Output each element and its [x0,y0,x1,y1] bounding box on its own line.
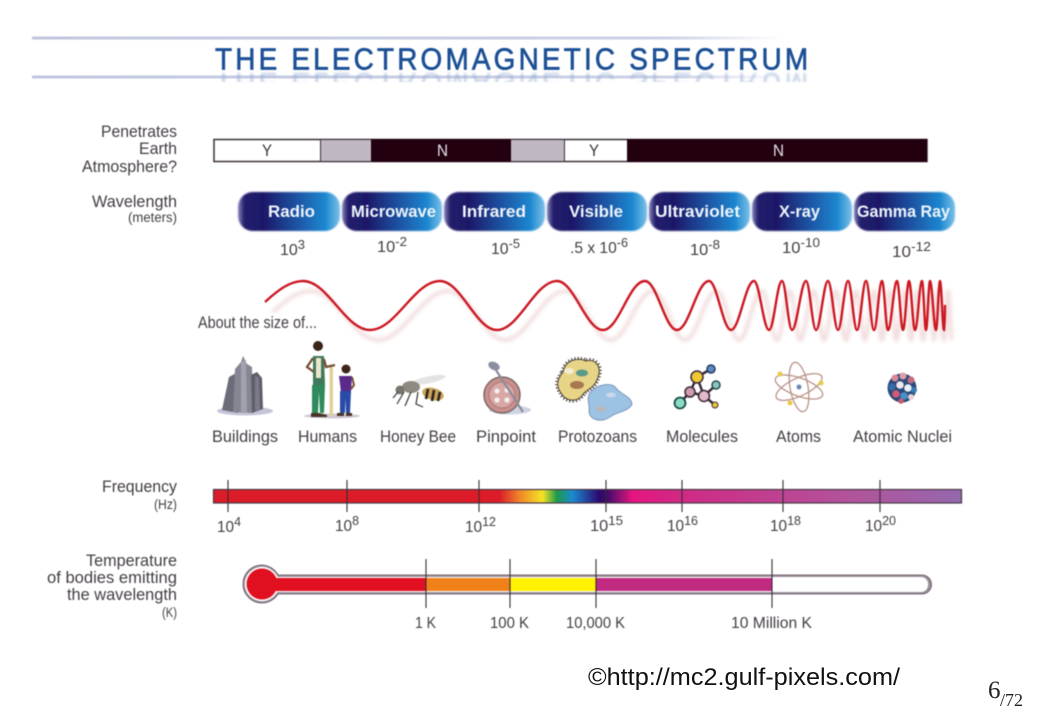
frequency label [102,477,177,512]
size labels: Honey Bee [380,427,456,446]
wavelength values: -10 [800,235,820,250]
frequency values: 10 [770,518,788,535]
wavelength values: 10 [377,239,395,256]
electromagnetic wave [265,281,945,330]
temperature label [47,551,177,620]
icon: protozoans [558,359,632,420]
wavelength values: -12 [911,239,931,254]
wavelength values: 10 [782,240,800,257]
size labels [212,427,952,446]
spectrum band pills [238,192,955,231]
frequency values: 8 [352,513,359,528]
title band [32,36,807,82]
frequency values: 15 [608,513,623,528]
temperature values: 100 K [490,615,529,632]
atmosphere penetration bar: N [437,141,448,160]
size comparison heading: About the size of... [198,313,317,332]
atmosphere label: Earth [139,139,177,158]
temperature values: 10 Million K [731,615,812,632]
title: THE ELECTROMAGNETIC SPECTRUM [215,42,808,77]
frequency values: 16 [684,513,698,528]
spectrum band pills: Radio [268,202,315,221]
icon: honey bee [393,373,446,407]
size labels: Protozoans [558,427,637,446]
frequency bar [214,480,962,512]
frequency values: 20 [882,513,896,528]
frequency values: 10 [865,518,883,535]
page number: 6 [988,677,1000,704]
wavelength values: -2 [395,234,407,249]
page number: /72 [1000,690,1023,710]
icon: atoms [772,361,826,413]
frequency values: 10 [335,518,353,535]
frequency values: 12 [482,514,496,529]
spectrum band pills: Gamma Ray [857,202,951,221]
icon: buildings [217,356,273,416]
size labels: Buildings [212,427,278,446]
wavelength values: 10 [892,244,910,261]
atmosphere label [82,122,177,176]
size labels: Atomic Nuclei [853,427,952,446]
wavelength values [280,234,931,261]
temperature label: (K) [162,605,177,620]
frequency values: 4 [234,514,241,529]
frequency label: (Hz) [154,497,177,512]
wavelength values: .5 x 10 [570,240,618,257]
frequency values: 10 [465,519,483,536]
icon: pinpoint [484,360,531,414]
atmosphere label: Penetrates [101,122,177,141]
spectrum band pills: Infrared [462,202,526,221]
wavelength values: 10 [491,241,509,258]
frequency values: 10 [590,518,608,535]
icon: humans [304,341,360,418]
icon: atomic nuclei [888,372,917,404]
frequency values: 10 [217,519,235,536]
temperature label: the wavelength [67,585,177,604]
temperature label: of bodies emitting [47,568,177,587]
wavelength values: -6 [617,235,628,250]
temperature values: 10,000 K [566,615,625,632]
frequency values: 10 [667,518,685,535]
temperature label: Temperature [86,551,177,570]
spectrum band pills: X-ray [779,202,821,221]
thermometer [243,559,932,608]
size labels: Pinpoint [476,427,536,446]
wavelength values: 3 [298,237,305,252]
atmosphere penetration bar [214,139,927,162]
wavelength values: 10 [280,242,298,259]
page number [988,677,1023,710]
source credit: ©http://mc2.gulf-pixels.com/ [588,664,900,691]
wavelength label: Wavelength [92,192,177,211]
size labels: Molecules [666,427,738,446]
frequency label: Frequency [102,477,177,496]
wavelength label [92,192,177,225]
wavelength label: (meters) [128,210,177,225]
spectrum band pills: Ultraviolet [655,202,740,221]
wavelength values: -5 [509,236,520,251]
temperature values [415,615,812,632]
spectrum band pills: Visible [569,202,623,221]
atmosphere penetration bar: N [773,141,784,160]
frequency values: 18 [787,513,801,528]
icon: molecules [674,365,720,408]
wavelength values: 10 [690,242,708,259]
atmosphere penetration bar: Y [262,141,272,160]
frequency values [217,513,896,536]
size labels: Humans [298,427,357,446]
wave shadow [273,291,952,340]
wavelength values: -8 [708,237,720,252]
title band: THE ELECTROMAGNETIC SPECTRUM [215,66,808,100]
atmosphere penetration bar: Y [589,141,599,160]
size labels: Atoms [776,427,821,446]
spectrum band pills: Microwave [351,202,436,221]
atmosphere label: Atmosphere? [82,157,177,176]
temperature values: 1 K [415,615,436,632]
